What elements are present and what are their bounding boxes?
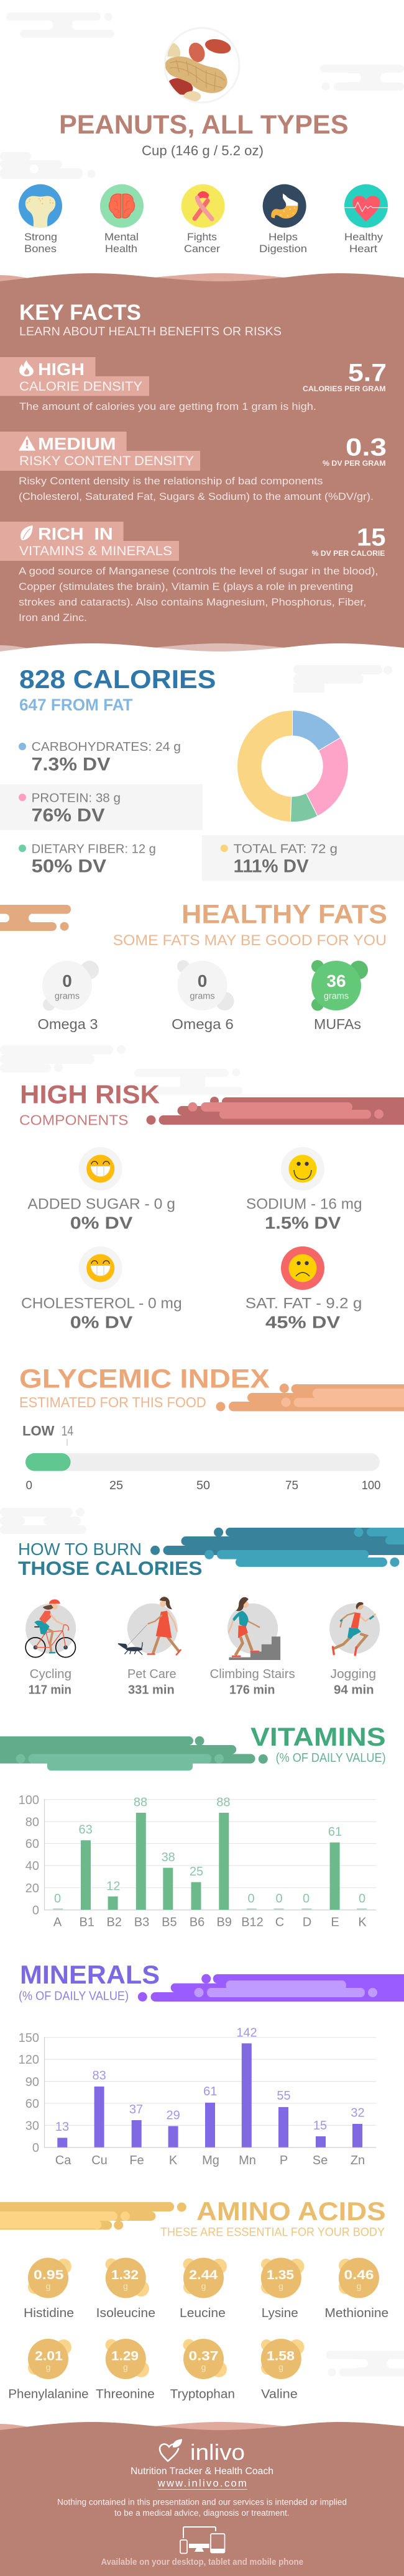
fact: rich in vitamins and minerals: % DV PER CALORIE [312, 549, 385, 558]
fact: rich in vitamins and minerals: Copper (stimulates the brain), Vitamin E (plays a role in preventing [19, 581, 353, 592]
nutrient: dietary fiber: DIETARY FIBER: 12 g [32, 842, 156, 856]
amino acid: threonine [96, 2339, 155, 2401]
amino acid: phenylalanine: Phenylalanine [8, 2387, 89, 2401]
bar chart: vitamins: C [275, 1916, 284, 1930]
heading: those calories: THOSE CALORIES [18, 1557, 203, 1579]
bar chart: vitamins: 0 [32, 1903, 39, 1917]
activity: pet care: 331 min [128, 1684, 175, 1697]
bar chart: vitamins: 0 [275, 1892, 283, 1905]
fact: high calorie density [0, 357, 387, 412]
fat: MUFAs: MUFAs [314, 1016, 361, 1032]
bar chart: minerals: 120 [19, 2053, 39, 2067]
amino acid: valine [261, 2339, 305, 2401]
activity: cycling [25, 1599, 76, 1697]
bar chart: vitamins: 61 [328, 1825, 342, 1839]
activity: climbing stairs [210, 1597, 295, 1697]
glycemic gauge [22, 1423, 380, 1492]
glycemic gauge: LOW [22, 1423, 55, 1439]
activity: climbing stairs: Climbing Stairs [210, 1667, 295, 1681]
bar chart: vitamins: B2 [106, 1916, 122, 1930]
activity: jogging [329, 1602, 380, 1697]
icon labels: Digestion [259, 243, 307, 255]
fat: omega 6: 0 [198, 971, 207, 991]
bar chart: minerals: Mg [202, 2154, 219, 2167]
icon: helps digestion [263, 184, 306, 228]
nutrient: dietary fiber [19, 842, 156, 876]
bar chart: vitamins: 63 [78, 1823, 93, 1837]
activity: cycling: Cycling [30, 1667, 71, 1681]
donut chart: macronutrients [237, 710, 348, 822]
bar chart: vitamins: B6 [190, 1916, 204, 1930]
bar chart: vitamins: 20 [25, 1882, 39, 1895]
nutrient: carbohydrates [19, 740, 181, 775]
fat: omega 6: grams [190, 991, 215, 1001]
bar chart: vitamins: B9 [216, 1916, 232, 1930]
website link: www.inlivo.com [157, 2478, 247, 2489]
calories background cloud [293, 665, 392, 692]
subheading: LEARN ABOUT HEALTH BENEFITS OR RISKS [19, 325, 282, 338]
bar chart: minerals: 61 [203, 2085, 217, 2098]
fact: high calorie density: HIGH [38, 360, 85, 379]
risk: cholesterol: CHOLESTEROL - 0 mg [21, 1295, 182, 1312]
fat: omega 3: 0 [62, 971, 72, 991]
bar chart: minerals: 150 [19, 2031, 39, 2045]
fact: rich in vitamins and minerals: 15 [357, 524, 386, 551]
fact: high calorie density: 5.7 [348, 359, 387, 386]
panel: key facts [0, 273, 404, 658]
bar chart: vitamins: B5 [162, 1916, 177, 1930]
serving size: Cup (146 g / 5.2 oz) [142, 143, 264, 158]
bar chart: vitamins: A [53, 1916, 62, 1930]
minerals decoration [138, 1974, 404, 2002]
bar chart: minerals: 13 [55, 2120, 69, 2134]
fact: medium risky content density: (Cholesterol, Saturated Fat, Sugars & Sodium) to the amount (%DV/gr). [19, 491, 374, 502]
icon labels: Strong [24, 231, 57, 243]
bar chart: minerals: 60 [25, 2097, 39, 2111]
bar chart: minerals: Mn [239, 2154, 256, 2167]
amino acid: tryptophan [170, 2339, 235, 2401]
bar chart: vitamins: 40 [25, 1859, 39, 1873]
subheading: minerals: (% OF DAILY VALUE) [19, 1989, 129, 2003]
nutrient: dietary fiber: 50% DV [32, 856, 106, 876]
bar chart: minerals: P [280, 2154, 288, 2167]
bar chart: vitamins: 88 [134, 1796, 147, 1810]
amino acid: lysine [261, 2258, 305, 2320]
fat: omega 6 [172, 960, 234, 1032]
nutrient: carbohydrates: 7.3% DV [32, 755, 111, 775]
amino acid: valine: Valine [261, 2387, 298, 2401]
bar chart: vitamins [19, 1794, 376, 1930]
disclaimer [57, 2498, 347, 2518]
icon labels: Mental [104, 231, 139, 243]
disclaimer: to be a medical advice, diagnosis or treatment. [114, 2508, 290, 2518]
amino acid: tryptophan: 0.37 [189, 2349, 219, 2363]
bar chart: vitamins: E [331, 1916, 339, 1930]
risk: sodium [246, 1147, 362, 1232]
subheading: glycemic: ESTIMATED FOR THIS FOOD [19, 1394, 206, 1410]
heading: glycemic index: GLYCEMIC INDEX [19, 1364, 270, 1394]
icon labels: Cancer [184, 243, 220, 255]
benefits icons row [19, 184, 388, 255]
availability note: Available on your desktop, tablet and mobile phone [101, 2557, 303, 2567]
activity: pet care: Pet Care [127, 1667, 177, 1681]
header background clouds [0, 12, 404, 179]
subheading: healthy fats: SOME FATS MAY BE GOOD FOR YOU [113, 932, 387, 949]
bar chart: vitamins: 12 [106, 1879, 121, 1893]
fact: rich in vitamins and minerals: RICH IN [38, 524, 113, 543]
glycemic gauge: 25 [109, 1479, 123, 1492]
amino acid: lysine: Lysine [262, 2306, 298, 2320]
glycemic gauge: 0 [26, 1479, 32, 1492]
nutrient: total fat: 111% DV [234, 856, 309, 876]
bar chart: vitamins: 0 [303, 1892, 310, 1905]
fat: MUFAs [311, 960, 368, 1032]
risk: saturated fat: 45% DV [265, 1312, 341, 1331]
fact: medium risky content density: 0.3 [346, 434, 387, 461]
heading: calories: 828 CALORIES [19, 664, 216, 694]
tagline: Nutrition Tracker & Health Coach [131, 2466, 273, 2477]
icon: healthy heart [344, 184, 388, 228]
title: PEANUTS, ALL TYPES [59, 110, 348, 140]
bar chart: minerals: 142 [236, 2026, 257, 2040]
bar chart: minerals: 83 [92, 2069, 106, 2083]
heading: amino acids: AMINO ACIDS [196, 2197, 386, 2226]
amino acid: methionine: 0.46 [344, 2268, 374, 2282]
risk: sodium: SODIUM - 16 mg [246, 1196, 362, 1213]
amino acid: histidine [24, 2258, 74, 2320]
fact: high calorie density: CALORIE DENSITY [19, 379, 142, 394]
risk: cholesterol [21, 1246, 182, 1331]
amino acid: leucine: 2.44 [189, 2268, 218, 2282]
glycemic decoration [216, 1384, 404, 1411]
fat: omega 3: Omega 3 [37, 1016, 98, 1032]
fact: rich in vitamins and minerals: A good source of Manganese (controls the level of sugar in the blood), [19, 566, 379, 577]
bar chart: minerals: 30 [25, 2120, 39, 2133]
icon labels [24, 231, 383, 255]
glycemic gauge: 75 [285, 1479, 298, 1492]
fact: high calorie density: The amount of calories you are getting from 1 gram is high. [19, 401, 316, 412]
logo wordmark: inlivo [190, 2439, 245, 2465]
icon labels: Healthy [344, 231, 383, 243]
bar chart: minerals: Fe [129, 2154, 144, 2167]
amino acid: phenylalanine: 2.01 [35, 2349, 63, 2363]
activity: pet care [118, 1597, 181, 1697]
heading: key facts: KEY FACTS [19, 301, 141, 325]
bar chart: vitamins: K [358, 1916, 367, 1930]
nutrient: protein [0, 784, 203, 830]
heading: how to burn: HOW TO BURN [18, 1540, 142, 1559]
amino acid: lysine: g [278, 2281, 283, 2291]
bar chart: vitamins: 25 [190, 1865, 203, 1879]
icon: fights cancer [181, 184, 225, 228]
fact: medium risky content density: % DV PER GRAM [323, 459, 385, 468]
amino acid: leucine: g [201, 2281, 206, 2291]
bar chart: minerals: 32 [351, 2107, 365, 2120]
activity: jogging: Jogging [331, 1667, 376, 1681]
high risk decoration [147, 1097, 404, 1125]
amino acid: tryptophan: Tryptophan [170, 2387, 235, 2401]
amino acid: histidine: g [46, 2281, 50, 2291]
bar chart: minerals: K [169, 2154, 178, 2167]
high risk background clouds [0, 1045, 242, 1095]
bar chart: minerals: Zn [351, 2154, 365, 2167]
bar chart: minerals: Cu [91, 2154, 108, 2167]
nutrient: protein: 76% DV [32, 805, 105, 826]
burn background cloud [0, 1508, 86, 1534]
bar chart: minerals: 37 [129, 2103, 143, 2116]
fact: medium risky content density [0, 432, 387, 502]
icon labels: Fights [187, 231, 217, 243]
amino acid: threonine: g [123, 2362, 128, 2372]
fact: medium risky content density: RISKY CONTENT DENSITY [19, 453, 194, 468]
amino acid: threonine: Threonine [96, 2387, 155, 2401]
icon: devices [180, 2527, 225, 2554]
fact: medium risky content density: MEDIUM [38, 434, 116, 453]
amino acid: histidine: 0.95 [34, 2268, 64, 2282]
amino acid: phenylalanine: g [46, 2362, 50, 2372]
amino acid: isoleucine [96, 2258, 155, 2320]
risk: added sugar: 0% DV [70, 1213, 133, 1232]
bar chart: vitamins: 100 [19, 1794, 39, 1807]
icon: strong bones [19, 184, 62, 229]
amino acid: tryptophan: g [201, 2362, 206, 2372]
amino acids decoration [0, 2202, 186, 2229]
amino acid: leucine [180, 2258, 227, 2320]
bar chart: vitamins: 0 [54, 1892, 61, 1905]
nutrient: total fat: TOTAL FAT: 72 g [234, 842, 337, 856]
bar chart: minerals: 0 [32, 2141, 39, 2155]
icon labels: Health [105, 243, 137, 255]
nutrient: total fat [202, 835, 404, 881]
peanut photo circle [165, 28, 239, 102]
bar chart: vitamins: 0 [247, 1892, 255, 1905]
fat: omega 3: grams [55, 991, 80, 1001]
amino acid: threonine: 1.29 [111, 2349, 139, 2363]
fact: rich in vitamins and minerals [0, 522, 386, 624]
bar chart: minerals: Se [313, 2154, 328, 2167]
fact: rich in vitamins and minerals: strokes and cataracts). Also contains Magnesium, Phosphorus, Fiber, [19, 597, 367, 608]
glycemic gauge: 100 [362, 1479, 380, 1492]
activity: climbing stairs: 176 min [229, 1684, 275, 1697]
glycemic gauge: 14 [62, 1423, 73, 1439]
bar chart: minerals: 15 [313, 2119, 327, 2133]
healthy fats decoration [0, 905, 78, 931]
amino acid: methionine: Methionine [324, 2306, 388, 2320]
nutrient: protein: PROTEIN: 38 g [32, 791, 121, 805]
bar chart: minerals: Ca [55, 2154, 71, 2167]
subheading: components: COMPONENTS [19, 1112, 128, 1128]
amino acid: methionine: g [357, 2281, 361, 2291]
bar chart: minerals: 55 [277, 2089, 291, 2103]
fact: rich in vitamins and minerals: VITAMINS & MINERALS [19, 543, 172, 558]
risk: saturated fat: SAT. FAT - 9.2 g [246, 1295, 362, 1312]
activity: cycling: 117 min [29, 1684, 71, 1697]
bar chart: minerals: 29 [166, 2109, 180, 2123]
footer [0, 2422, 404, 2576]
fact: high calorie density: CALORIES PER GRAM [303, 384, 385, 393]
bar chart: minerals [19, 2026, 376, 2167]
bar chart: vitamins: B1 [79, 1916, 94, 1930]
fact: medium risky content density: Risky Content density is the relationship of bad components [19, 476, 323, 487]
disclaimer: Nothing contained in this presentation and our services is intended or implied [57, 2498, 347, 2507]
icon labels: Helps [269, 231, 298, 243]
bar chart: vitamins: 38 [162, 1851, 175, 1864]
amino acid: leucine: Leucine [180, 2306, 226, 2320]
risk: added sugar [27, 1147, 175, 1232]
icon: inlivo heart logo [160, 2439, 182, 2461]
heading: vitamins: VITAMINS [250, 1722, 386, 1751]
bar chart: vitamins: B12 [241, 1916, 264, 1930]
bar chart: vitamins: D [303, 1916, 311, 1930]
subheading: calories from fat: 647 FROM FAT [19, 696, 133, 714]
risk: saturated fat [246, 1246, 362, 1331]
icon labels: Bones [24, 243, 57, 255]
fact: rich in vitamins and minerals: Iron and Zinc. [19, 612, 87, 624]
heading: high risk: HIGH RISK [20, 1079, 160, 1109]
fat: omega 6: Omega 6 [172, 1016, 234, 1032]
amino background cloud [326, 2351, 404, 2376]
amino acid: lysine: 1.35 [267, 2268, 294, 2282]
vitamins decoration [0, 1736, 268, 1771]
amino acid: valine: 1.58 [267, 2349, 295, 2363]
subheading: amino acids: THESE ARE ESSENTIAL FOR YOUR BODY [160, 2226, 385, 2239]
fat: omega 3 [37, 961, 99, 1032]
icon labels: Heart [349, 243, 377, 255]
fat: MUFAs: grams [324, 991, 349, 1001]
amino acid: histidine: Histidine [24, 2306, 74, 2320]
amino acid: isoleucine: 1.32 [111, 2268, 139, 2282]
bar chart: vitamins: 88 [216, 1796, 231, 1810]
glycemic gauge: 50 [196, 1479, 210, 1492]
activity: jogging: 94 min [334, 1684, 374, 1697]
risk: cholesterol: 0% DV [70, 1312, 133, 1331]
risk: sodium: 1.5% DV [265, 1213, 341, 1232]
bar chart: vitamins: B3 [134, 1916, 149, 1930]
bar chart: vitamins: 80 [25, 1816, 39, 1830]
subheading: vitamins: (% OF DAILY VALUE) [276, 1751, 386, 1765]
bar chart: minerals: 90 [25, 2075, 39, 2089]
burn decoration [150, 1528, 404, 1567]
nutrient: carbohydrates: CARBOHYDRATES: 24 g [32, 740, 181, 754]
bar chart: vitamins: 0 [359, 1892, 365, 1905]
risk: added sugar: ADDED SUGAR - 0 g [27, 1196, 175, 1213]
amino acid: methionine [324, 2258, 388, 2320]
amino acid: isoleucine: g [123, 2281, 128, 2291]
amino acid: phenylalanine [8, 2339, 89, 2401]
fat: MUFAs: 36 [326, 971, 346, 991]
heading: healthy fats: HEALTHY FATS [181, 900, 387, 930]
amino acid: valine: g [278, 2362, 283, 2372]
bar chart: vitamins: 60 [25, 1838, 39, 1851]
amino acid: isoleucine: Isoleucine [96, 2306, 155, 2320]
icon: mental health [100, 184, 144, 228]
heading: minerals: MINERALS [20, 1960, 160, 1989]
